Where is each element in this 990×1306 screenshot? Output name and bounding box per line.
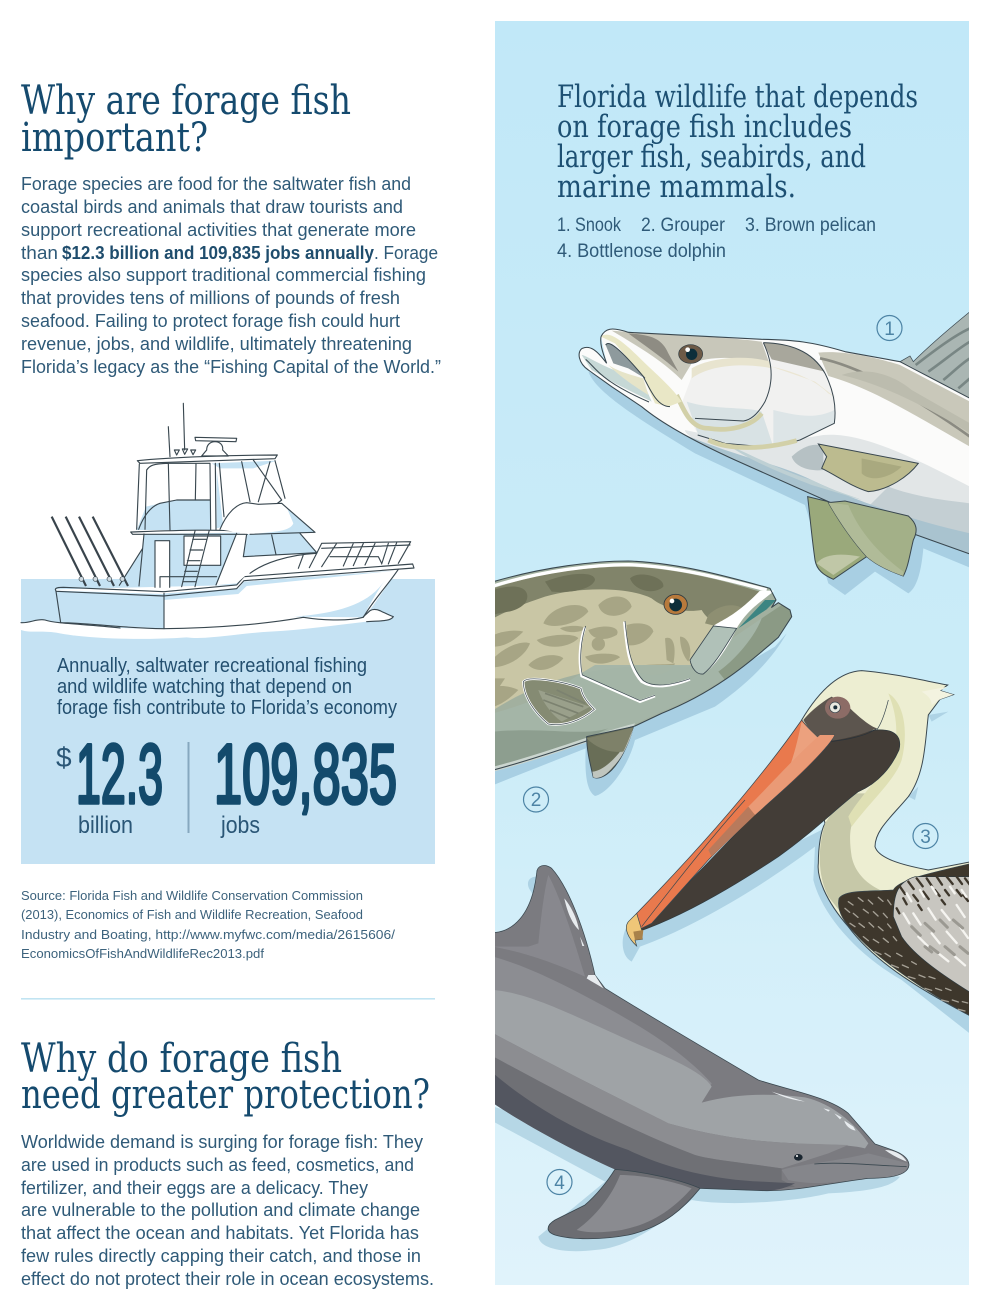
number marker 1: 1 — [884, 319, 895, 340]
icon: brown pelican — [623, 671, 972, 1035]
source citation — [21, 888, 395, 961]
fishing rods — [52, 517, 128, 586]
dolphin flipper — [548, 1169, 700, 1239]
panel: Florida wildlife — [493, 21, 972, 1285]
text block: forage species importance: revenue, jobs, and wildlife, ultimately threatening — [21, 333, 412, 354]
grouper ventral fin — [587, 727, 633, 778]
stat: 109,835 jobs: jobs — [220, 812, 260, 839]
text block: forage species importance: seafood. Failing to protect forage fish could hurt — [21, 310, 401, 331]
grouper white rim and outline — [493, 565, 767, 590]
text block: forage species importance: support recreational activities that generate more — [21, 219, 416, 240]
heading: Florida wildlife: marine mammals. — [557, 169, 796, 205]
panel: economy stats box — [21, 579, 435, 864]
text block: demand and protection: Worldwide demand is surging for forage fish: They — [21, 1131, 424, 1152]
grouper blotches — [493, 596, 745, 707]
text block: demand and protection: that affect the ocean and habitats. Yet Florida has — [21, 1222, 419, 1243]
dolphin shadow — [528, 876, 536, 894]
stat: 109,835 jobs — [214, 727, 397, 839]
heading: why do forage fish need greater protection: need greater protection? — [21, 1072, 430, 1118]
heading: why do forage fish need greater protection — [21, 1036, 430, 1118]
source citation: (2013), Economics of Fish and Wildlife Recreation, Seafood — [21, 907, 363, 922]
grouper body — [495, 562, 791, 726]
text block: demand and protection — [21, 1131, 434, 1289]
heading: Florida wildlife — [557, 79, 918, 205]
grouper belly — [582, 665, 692, 675]
heading: why do forage fish need greater protection: Why do forage fish — [21, 1036, 342, 1082]
heading: why are forage fish important — [21, 78, 351, 161]
pelican eye — [825, 697, 850, 719]
number marker 2: 2 — [531, 790, 541, 811]
species list: 3. Brown pelican — [745, 215, 876, 236]
text block: forage species importance: Forage species are food for the saltwater fish and — [21, 173, 411, 194]
wing feathers — [838, 863, 972, 1017]
eye — [679, 345, 703, 363]
stat: 12.3 billion dollars: 12.3 — [76, 727, 163, 821]
anal fin — [828, 501, 916, 576]
text block: demand and protection: are used in products such as feed, cosmetics, and — [21, 1154, 414, 1175]
grouper pectoral fin — [523, 679, 594, 725]
pouch and face dark — [638, 730, 900, 932]
pelican shadow — [623, 827, 972, 1035]
grouper gill lines — [580, 622, 690, 702]
snook body base — [580, 330, 969, 486]
number marker 1 — [877, 316, 902, 340]
source citation: Industry and Boating, http://www.myfwc.com/media/2615606/ — [21, 927, 395, 942]
text block: forage species importance — [21, 173, 441, 377]
icon: bottlenose dolphin — [493, 866, 909, 1251]
stat intro text: and wildlife watching that depend on — [57, 675, 352, 698]
text block: forage species importance: species also support traditional commercial fishing — [21, 264, 426, 285]
gill plate outline — [695, 343, 835, 447]
icon: grouper — [493, 561, 792, 796]
divider between stats — [188, 742, 190, 833]
text block: demand and protection: few rules directly capping their catch, and those in — [21, 1245, 421, 1266]
dolphin mouth and eye — [814, 1163, 907, 1167]
dolphin highlights — [564, 898, 907, 1162]
number marker 2 — [524, 787, 548, 812]
snook shadow — [588, 372, 972, 595]
neck and head — [802, 671, 972, 1017]
number marker 3 — [913, 824, 938, 848]
source citation: Source: Florida Fish and Wildlife Conservation Commission — [21, 888, 363, 903]
head shading — [612, 331, 770, 380]
text block: forage species importance: that provides tens of millions of pounds of fresh — [21, 287, 400, 308]
text block: demand and protection: effect do not protect their role in ocean ecosystems. — [21, 1268, 434, 1289]
stat intro text: forage fish contribute to Florida’s economy — [57, 696, 398, 719]
bill tip — [626, 913, 642, 946]
dolphin outline — [493, 866, 909, 1191]
text block: forage species importance: coastal birds and animals that draw tourists and — [21, 196, 403, 217]
text block: demand and protection: are vulnerable to the pollution and climate change — [21, 1199, 420, 1220]
species list: 1. Snook — [557, 215, 621, 236]
species list: 2. Grouper — [641, 215, 726, 236]
dorsal fin — [900, 312, 970, 400]
snook outline — [579, 329, 970, 554]
text block: demand and protection: fertilizer, and their eggs are a delicacy. They — [21, 1177, 369, 1198]
stat intro text — [57, 654, 398, 719]
number marker 4 — [547, 1170, 572, 1194]
source citation: EconomicsOfFishAndWildlifeRec2013.pdf — [21, 946, 264, 961]
text block: forage species importance: than — [21, 242, 58, 263]
species list — [557, 215, 876, 262]
stat: 12.3 billion dollars: billion — [78, 812, 133, 839]
stat: 109,835 jobs: 109,835 — [214, 727, 397, 821]
species list: 4. Bottlenose dolphin — [557, 241, 726, 262]
dolphin body — [493, 866, 909, 1191]
heading: Florida wildlife: larger fish, seabirds, and — [557, 139, 866, 175]
text block: forage species importance: Florida’s legacy as the “Fishing Capital of the World.” — [21, 356, 441, 377]
text block: forage species importance: . Forage — [374, 242, 438, 263]
stat: 12.3 billion dollars — [56, 727, 163, 839]
pelvic fin — [808, 497, 867, 579]
dorsal fin shading — [493, 875, 585, 977]
number marker 4: 4 — [554, 1173, 565, 1194]
grouper mouth — [718, 605, 791, 680]
icon: fishing boat — [21, 403, 414, 639]
heading: why are forage fish important: Why are forage fish — [21, 78, 351, 124]
mouth — [601, 335, 682, 407]
stat: 12.3 billion dollars: $ — [56, 742, 72, 773]
icon: snook — [579, 312, 972, 595]
heading: why are forage fish important: important? — [21, 115, 208, 161]
heading: Florida wildlife: on forage fish includes — [557, 109, 852, 145]
text block: forage species importance: $12.3 billion and 109,835 jobs annually — [62, 242, 375, 263]
pectoral fin — [818, 444, 918, 492]
number marker 3: 3 — [920, 827, 931, 848]
grouper shadow — [493, 633, 787, 796]
grouper eye — [664, 594, 687, 614]
bill — [637, 720, 834, 930]
stat intro text: Annually, saltwater recreational fishing — [57, 654, 367, 677]
